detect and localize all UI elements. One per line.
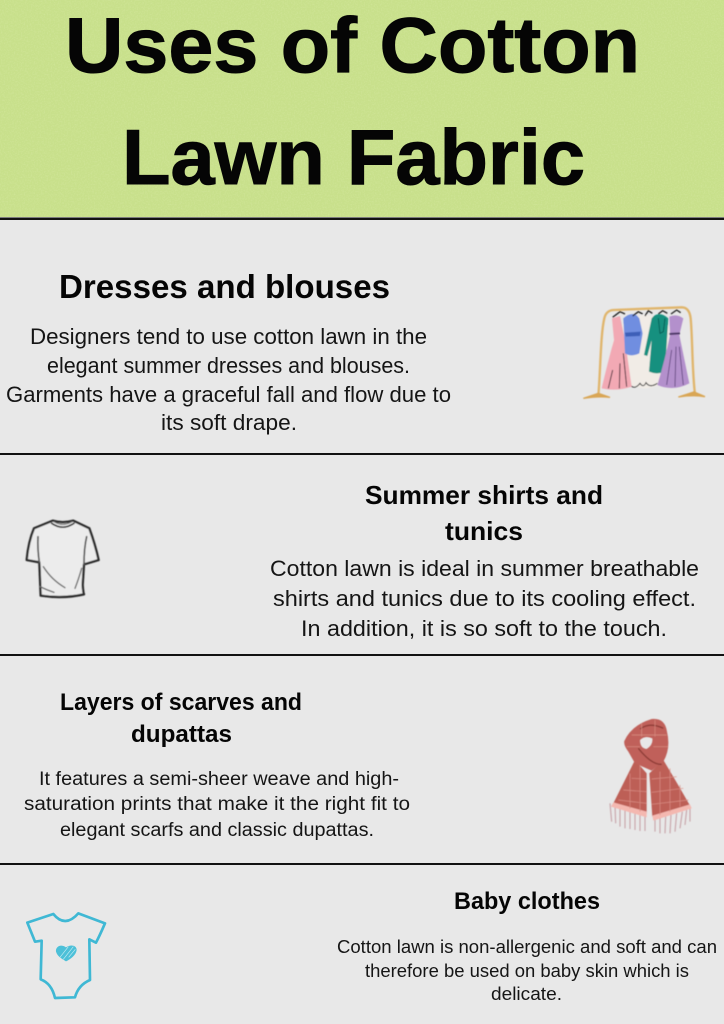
title: Lawn Fabric [122, 113, 585, 201]
text block: dresses description: Garments have a graceful fall and flow due to [6, 382, 451, 407]
icon: baby onesie [27, 913, 105, 998]
text block: baby clothes description: Cotton lawn is non-allergenic and soft and can [337, 937, 717, 957]
heading: baby clothes: Baby clothes [454, 888, 600, 915]
text block: shirts description: shirts and tunics due to its cooling effect. [273, 586, 696, 611]
heading: summer shirts and tunics [365, 480, 603, 546]
panel: scarves and dupattas [24, 689, 692, 841]
header banner [0, 0, 724, 217]
panel: summer shirts and tunics [27, 480, 699, 641]
text block: baby clothes description: delicate. [491, 984, 562, 1004]
heading: scarves and dupattas: dupattas [131, 721, 232, 748]
heading: scarves and dupattas [60, 689, 302, 748]
text block: dresses description [6, 324, 451, 435]
text block: shirts description: Cotton lawn is ideal in summer breathable [270, 556, 699, 581]
text block: scarves description: saturation prints that make it the right fit to [24, 794, 410, 815]
text block: shirts description [270, 556, 699, 641]
text block: dresses description: its soft drape. [161, 410, 297, 435]
icon: clothes rack with dresses [583, 307, 705, 398]
text block: scarves description: elegant scarfs and classic dupattas. [60, 820, 374, 841]
heading: scarves and dupattas: Layers of scarves and [60, 689, 302, 716]
title: Uses of Cotton [65, 1, 640, 89]
heading: summer shirts and tunics: tunics [445, 516, 523, 546]
text block: baby clothes description: therefore be used on baby skin which is [365, 961, 689, 981]
title [65, 1, 640, 201]
text block: baby clothes description [337, 937, 717, 1004]
panel: baby clothes [27, 888, 717, 1004]
icon: t-shirt [27, 521, 99, 597]
heading: dresses and blouses: Dresses and blouses [59, 268, 390, 305]
heading: summer shirts and tunics: Summer shirts and [365, 480, 603, 510]
text block: dresses description: Designers tend to use cotton lawn in the [30, 324, 427, 349]
text block: shirts description: In addition, it is so soft to the touch. [301, 616, 667, 641]
text block: dresses description: elegant summer dresses and blouses. [47, 353, 410, 378]
text block: scarves description [24, 769, 410, 841]
icon: scarf [610, 719, 692, 833]
panel: dresses and blouses [6, 268, 705, 435]
text block: scarves description: It features a semi-sheer weave and high- [39, 769, 399, 790]
